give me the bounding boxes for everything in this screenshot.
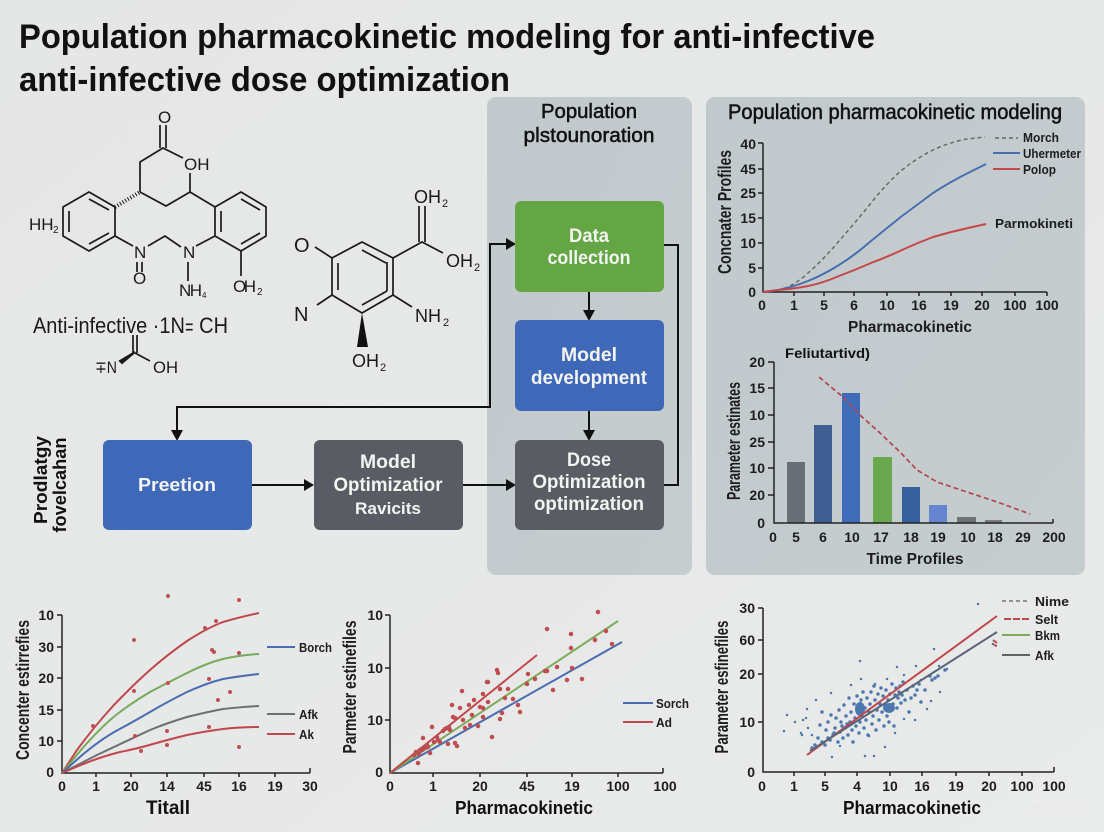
bar chart: parameter estimates: 0 (757, 515, 765, 531)
chart: concentration estimates curves: Concenter estirrefies (13, 620, 33, 760)
scatter chart: parameter estimates with blue points: 100 (1042, 778, 1066, 794)
molecule: large tricyclic structure: 2 (257, 287, 263, 298)
bar chart: parameter estimates: 25 (749, 434, 765, 450)
bar chart: parameter estimates: 10 (749, 460, 765, 476)
chart: parameter estimates with red points: 19 (564, 778, 580, 794)
molecule: substituted benzene ring: O (294, 235, 310, 257)
bar chart: parameter estimates: 10 (844, 529, 860, 545)
line chart: concentration profiles (715, 131, 1081, 336)
scatter chart: parameter estimates with blue points: 60 (739, 632, 755, 648)
watermark (1031, 799, 1086, 816)
bar chart: parameter estimates: 10 (749, 407, 765, 423)
chart: concentration estimates curves: Titall (146, 798, 190, 819)
box: data collection: collection (548, 248, 630, 269)
chart legend: Afk (299, 708, 318, 722)
box: prediction: Preetion (138, 475, 216, 495)
scatter chart: parameter estimates with blue points: 20 (981, 778, 997, 794)
molecule: large tricyclic structure: O (158, 108, 171, 127)
chart legend: Polop (1023, 163, 1056, 177)
box: dose optimization: Optimization (532, 472, 646, 493)
scatter chart: parameter estimates with blue points: Pharmacokinetic (843, 798, 981, 818)
molecule: anti-infective label and fragment: OH (153, 358, 178, 377)
panel heading: population workflow (524, 101, 654, 147)
chart: parameter estimates with red points (340, 607, 689, 818)
molecule: large tricyclic structure: 4 (202, 291, 207, 300)
molecule: substituted benzene ring: NH (415, 306, 441, 326)
arrow: model optimization to dose (463, 479, 516, 491)
box: model optimization: Ravicits (355, 499, 421, 518)
panel: population workflow background (487, 97, 692, 575)
line chart: concentration profiles: 40 (740, 136, 756, 152)
scatter chart: parameter estimates with blue points: 100 (1010, 778, 1034, 794)
box: dose optimization: Dose (567, 450, 611, 471)
line chart: concentration profiles: Concnater Profiles (715, 150, 735, 274)
bar chart: parameter estimates: 19 (930, 529, 946, 545)
line chart: concentration profiles: 5 (820, 297, 828, 313)
title: Population pharmacokinetic modeling for anti-infective (19, 18, 875, 56)
line chart: concentration profiles: 0 (758, 297, 766, 313)
bar chart: parameter estimates: 6 (819, 529, 827, 545)
chart legend: Nime (1035, 595, 1069, 609)
chart: concentration estimates curves: 0 (46, 764, 54, 780)
box: model development (515, 320, 664, 411)
molecule: anti-infective label and fragment: ∓N (95, 358, 117, 377)
molecule: substituted benzene ring: 2 (474, 262, 480, 274)
arrow: prediction loop to data collection (171, 238, 516, 441)
molecule: large tricyclic structure: O (133, 269, 146, 288)
box: dose optimization: optimization (534, 494, 644, 515)
box: model development: Model (561, 345, 617, 366)
molecule: substituted benzene ring: 2 (443, 317, 449, 329)
arrow: dose optimization loop (663, 245, 678, 485)
line chart: concentration profiles: 100 (1035, 297, 1059, 313)
chart legend (267, 641, 332, 742)
chart legend: Ak (299, 728, 314, 742)
molecule: substituted benzene ring (294, 187, 480, 374)
scatter chart: parameter estimates with blue points: 10 (739, 714, 755, 730)
chart: parameter estimates with red points: 100 (653, 778, 677, 794)
bar chart: parameter estimates: Time Profiles (866, 551, 964, 568)
molecule: substituted benzene ring: OH (446, 251, 473, 271)
chart legend: Selt (1035, 613, 1059, 627)
bar chart: parameter estimates: 18 (903, 529, 919, 545)
chart legend: Morch (1023, 131, 1059, 145)
chart: parameter estimates with red points: 10 (367, 607, 383, 623)
line chart: concentration profiles: 16 (911, 297, 927, 313)
bar chart: parameter estimates: 17 (873, 529, 889, 545)
box: prediction (103, 440, 252, 530)
line chart: concentration profiles: 15 (740, 210, 756, 226)
chart: concentration estimates curves: 16 (231, 778, 247, 794)
bar chart: parameter estimates: Feliutartivd) (785, 345, 870, 361)
line chart: concentration profiles: 6 (850, 297, 858, 313)
title (19, 18, 875, 99)
molecule: anti-infective label and fragment (33, 313, 228, 377)
side label: Prodlatgy (31, 436, 51, 524)
bar chart: parameter estimates: 15 (749, 380, 765, 396)
bar chart: parameter estimates: 0 (769, 529, 777, 545)
chart legend: Bkm (1035, 629, 1060, 643)
molecule: anti-infective label and fragment: Anti-infective ·1N꞊ CH (33, 313, 228, 338)
arrow: data to model development (583, 292, 595, 321)
chart legend: Ad (656, 716, 672, 730)
molecule: large tricyclic structure: N (134, 243, 146, 262)
box: data collection (515, 201, 664, 292)
chart legend: Afk (1035, 649, 1054, 663)
chart: concentration estimates curves: 20 (123, 778, 139, 794)
molecule: large tricyclic structure: NH (179, 281, 202, 300)
bar chart: parameter estimates: 29 (1015, 529, 1031, 545)
molecule: large tricyclic structure (29, 108, 266, 300)
chart: concentration estimates curves: 14 (159, 778, 175, 794)
box: model optimization (314, 440, 463, 530)
chart: concentration estimates curves: 20 (38, 670, 54, 686)
chart: parameter estimates with red points: Parmeter estinefiles (340, 620, 360, 754)
chart legend (623, 697, 689, 730)
chart: parameter estimates with red points: 20 (472, 778, 488, 794)
scatter chart: parameter estimates with blue points: 16 (914, 778, 930, 794)
molecule: substituted benzene ring: N (294, 304, 308, 326)
chart: concentration estimates curves: 15 (38, 702, 54, 718)
chart: concentration estimates curves: 19 (267, 778, 283, 794)
molecule: substituted benzene ring: OH (352, 351, 379, 371)
chart: concentration estimates curves: 45 (196, 778, 212, 794)
box: model development: development (531, 368, 648, 389)
line chart: concentration profiles: Pharmacokinetic (848, 319, 972, 336)
bar chart: parameter estimates: 18 (987, 529, 1003, 545)
molecule: large tricyclic structure: N (183, 243, 195, 262)
molecule: large tricyclic structure: HH (29, 215, 54, 234)
scatter chart: parameter estimates with blue points: 5 (821, 778, 829, 794)
scatter chart: parameter estimates with blue points: 20 (739, 666, 755, 682)
scatter chart: parameter estimates with blue points: 0 (758, 778, 766, 794)
chart: parameter estimates with red points: 1 (429, 778, 437, 794)
chart legend (1002, 595, 1069, 663)
scatter chart: parameter estimates with blue points: 30 (739, 600, 755, 616)
panel: charts background (706, 97, 1085, 575)
chart: parameter estimates with red points: 0 (386, 778, 394, 794)
bar chart: parameter estimates: 20 (749, 487, 765, 503)
scatter chart: parameter estimates with blue points: 0 (747, 764, 755, 780)
line chart: concentration profiles: 100 (1003, 297, 1027, 313)
side label: fovelcahan (50, 438, 70, 532)
side label (31, 436, 70, 532)
scatter chart: parameter estimates with blue points: 19 (948, 778, 964, 794)
chart: parameter estimates with red points: 45 (519, 778, 535, 794)
scatter chart: parameter estimates with blue points: Parameter esfinefiles (712, 620, 732, 754)
molecule: substituted benzene ring: 2 (380, 362, 386, 374)
box: dose optimization (515, 440, 664, 530)
line chart: concentration profiles: 5 (748, 260, 756, 276)
chart: concentration estimates curves: 10 (38, 607, 54, 623)
bar chart: parameter estimates: 20 (749, 354, 765, 370)
panel heading: population pharmacokinetic modeling: Population pharmacokinetic modeling (728, 101, 1062, 124)
title: anti-infective dose optimization (19, 61, 510, 99)
chart: concentration estimates curves: 30 (38, 639, 54, 655)
scatter chart: parameter estimates with blue points (712, 595, 1069, 818)
watermark: Grok (1053, 799, 1086, 816)
molecule: large tricyclic structure: OH (184, 155, 210, 174)
chart: parameter estimates with red points: 10 (367, 712, 383, 728)
box: model optimization: Model (360, 452, 416, 473)
chart: concentration estimates curves: 1 (92, 778, 100, 794)
chart: concentration estimates curves: 30 (302, 778, 318, 794)
bar chart: parameter estimates: Parameter estinates (724, 382, 744, 500)
molecule: large tricyclic structure: OH (233, 277, 256, 296)
chart: parameter estimates with red points: 100 (606, 778, 630, 794)
chart: parameter estimates with red points: Pharmacokinetic (455, 798, 593, 818)
chart legend: Uhermeter (1023, 147, 1081, 161)
bar chart: parameter estimates: 5 (792, 529, 800, 545)
line chart: concentration profiles: 0 (748, 284, 756, 300)
chart legend: Parmokineti (995, 217, 1073, 231)
bar chart: parameter estimates (724, 345, 1066, 568)
chart: concentration estimates curves (13, 596, 332, 819)
line chart: concentration profiles: 45 (740, 161, 756, 177)
chart: concentration estimates curves: 10 (38, 733, 54, 749)
molecule: substituted benzene ring: OH (414, 187, 441, 207)
panel heading: population workflow: Population (541, 101, 637, 123)
line chart: concentration profiles: 25 (740, 185, 756, 201)
line chart: concentration profiles: 20 (974, 297, 990, 313)
arrow: prediction to model optimization (251, 479, 314, 491)
line chart: concentration profiles: 1 (790, 297, 798, 313)
line chart: concentration profiles: 10 (879, 297, 895, 313)
arrow: model development to dose (583, 411, 595, 441)
chart: parameter estimates with red points: 10 (367, 660, 383, 676)
panel heading: population workflow: plstounoration (524, 125, 654, 147)
bar chart: parameter estimates: 10 (960, 529, 976, 545)
bars (787, 393, 1002, 523)
chart: parameter estimates with red points: 0 (375, 764, 383, 780)
bar chart: parameter estimates: 200 (1042, 529, 1066, 545)
molecule: substituted benzene ring: 2 (442, 198, 448, 210)
scatter chart: parameter estimates with blue points: 10 (882, 778, 898, 794)
chart: concentration estimates curves: 0 (58, 778, 66, 794)
molecule: large tricyclic structure: 2 (53, 225, 59, 236)
scatter chart: parameter estimates with blue points: 4 (853, 778, 861, 794)
chart legend: Sorch (656, 697, 689, 711)
box: model optimization: Optimizatior (334, 475, 443, 496)
line chart: concentration profiles: 19 (943, 297, 959, 313)
chart legend: Borch (299, 641, 332, 655)
box: data collection: Data (569, 226, 609, 247)
line chart: concentration profiles: 10 (740, 235, 756, 251)
scatter chart: parameter estimates with blue points: 1 (790, 778, 798, 794)
chart legend (993, 131, 1081, 231)
